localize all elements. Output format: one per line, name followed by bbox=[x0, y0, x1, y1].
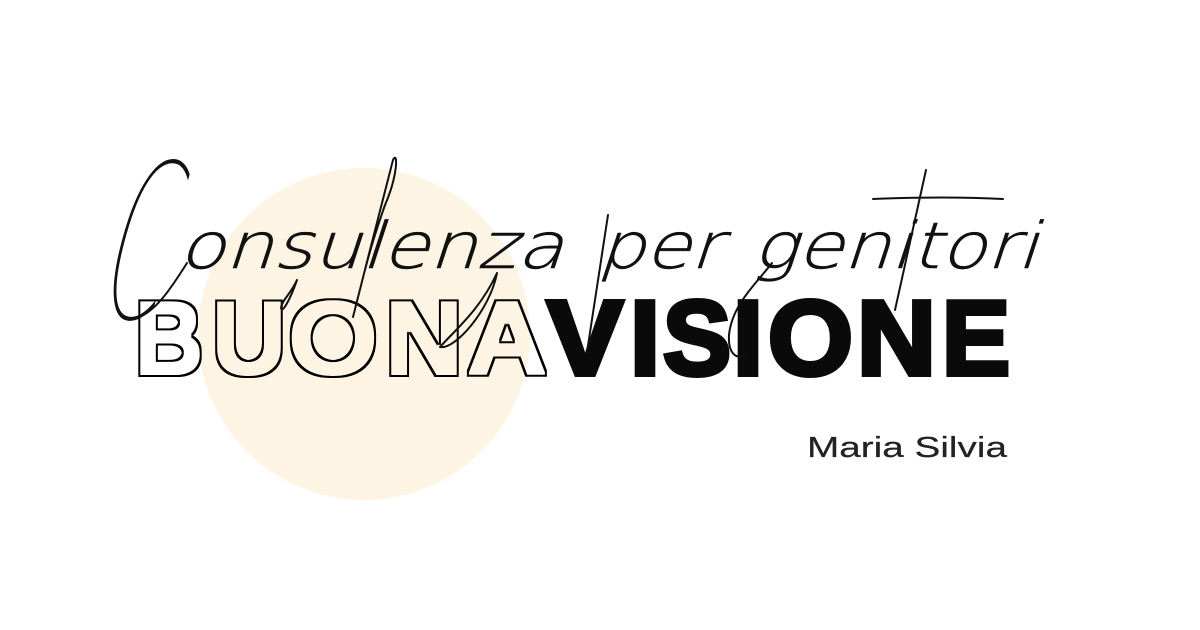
heading: VISIONE solid: N bbox=[857, 280, 936, 398]
script flourishes bbox=[137, 158, 1003, 356]
heading: VISIONE solid: I bbox=[733, 280, 763, 398]
heading: VISIONE solid: I bbox=[630, 280, 660, 398]
script initial C: C bbox=[78, 116, 211, 372]
script title: onsulenza per genitori bbox=[137, 158, 1056, 356]
heading: BUONA outlined: U bbox=[212, 281, 286, 397]
decorative cream circle bbox=[198, 168, 530, 500]
heading: VISIONE solid: S bbox=[663, 280, 731, 398]
heading: VISIONE solid: E bbox=[942, 280, 1010, 398]
heading: BUONA outlined: N bbox=[385, 281, 463, 397]
heading: BUONA outlined: A bbox=[467, 281, 547, 397]
script title: onsulenza per genitori: per bbox=[593, 210, 739, 284]
script title: onsulenza per genitori: genitori bbox=[747, 210, 1056, 284]
heading: BUONA outlined: O bbox=[288, 281, 378, 397]
heading: VISIONE solid bbox=[547, 280, 1010, 398]
heading: VISIONE solid: O bbox=[768, 280, 853, 398]
heading: VISIONE solid: V bbox=[547, 280, 623, 398]
script title: onsulenza per genitori: onsulenza bbox=[173, 210, 582, 284]
heading: BUONA outlined: B bbox=[135, 281, 203, 397]
heading: BUONA outlined bbox=[135, 281, 547, 397]
author name: Maria Silvia bbox=[807, 432, 1008, 464]
